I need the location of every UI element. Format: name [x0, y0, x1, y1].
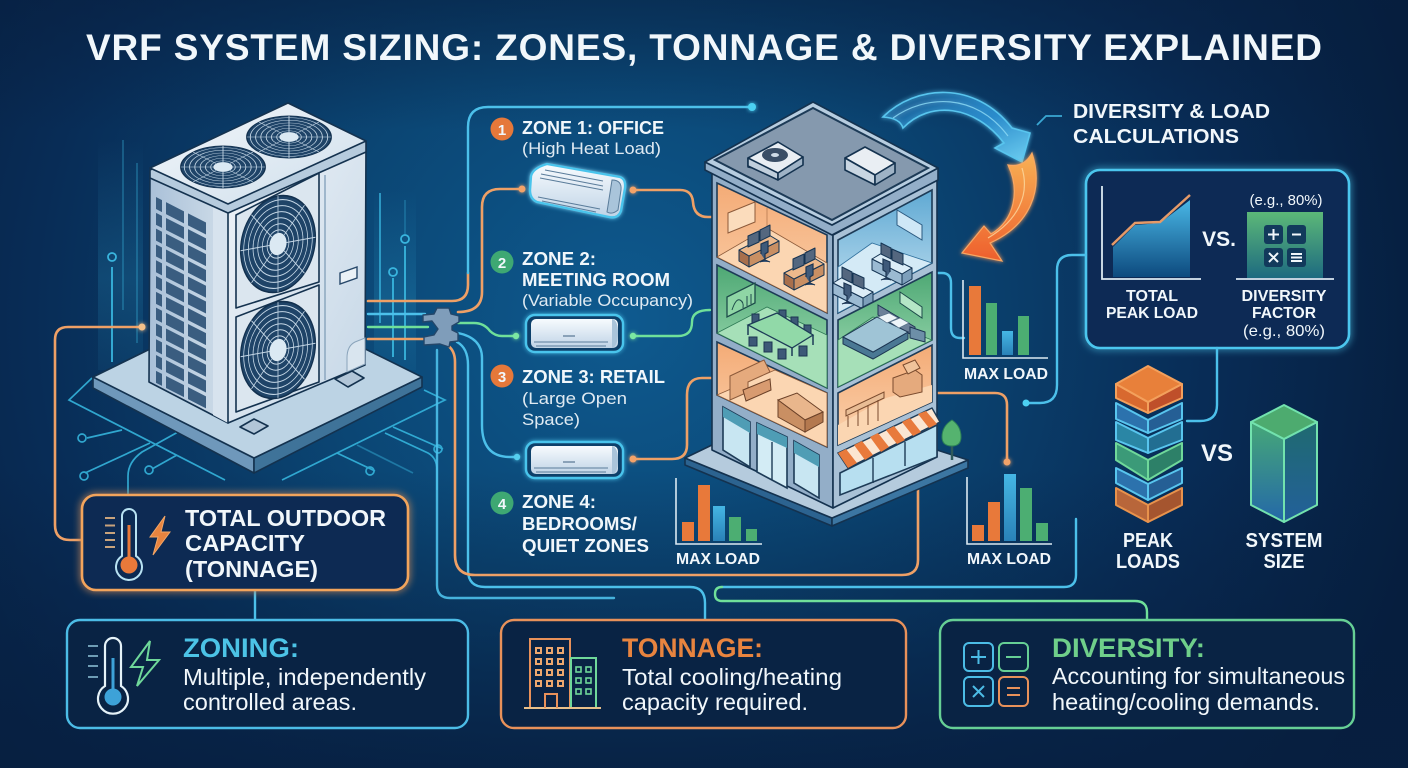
- dot: panel connector end: [1022, 400, 1030, 406]
- panel: total outdoor capacity: [82, 495, 408, 590]
- unit right face: [228, 142, 366, 423]
- heading: diversity and load calculations: CALCULATIONS: [1073, 126, 1239, 148]
- panel: zoning: [67, 620, 468, 728]
- zone 1 label: [490, 118, 664, 158]
- zone 1 label: ZONE 1: OFFICE: [522, 118, 664, 138]
- label: system size: [1246, 530, 1322, 573]
- panel: tonnage: [501, 620, 906, 728]
- labels: TOTAL: [1126, 288, 1178, 305]
- floor: office: [717, 183, 827, 313]
- zone 2 label: ZONE 2:: [522, 249, 596, 269]
- icon: calculator keys: [964, 643, 1028, 706]
- icon: indoor unit zone 3: [526, 442, 623, 478]
- label: system size: SYSTEM: [1246, 530, 1322, 552]
- icon: peak loads stack: [1116, 366, 1182, 522]
- floor: open office: [833, 190, 932, 313]
- text: TOTAL OUTDOOR: [185, 505, 386, 531]
- label: system size: SIZE: [1264, 551, 1304, 573]
- text: Accounting for simultaneous: [1052, 663, 1345, 689]
- heading: diversity and load calculations: DIVERSITY & LOAD: [1073, 101, 1270, 123]
- icon: system size block: [1251, 405, 1317, 522]
- zone 2 label: [490, 249, 693, 310]
- zone 1 label: 1: [498, 122, 506, 139]
- unit left louvred face: [149, 172, 228, 423]
- icon: indoor unit zone 1: [530, 164, 625, 217]
- unit service panel: [240, 175, 365, 434]
- vertical signal lines around outdoor unit: [108, 140, 409, 362]
- zone 4 label: [490, 492, 649, 556]
- dot: outer frame end: [748, 103, 756, 111]
- zone 3 label: ZONE 3: RETAIL: [522, 367, 665, 387]
- unit front fans: [236, 173, 319, 412]
- labels: FACTOR: [1252, 305, 1316, 322]
- vs label: VS.: [1202, 228, 1236, 251]
- floor: bedroom: [838, 272, 932, 387]
- line end dots: [138, 186, 1010, 466]
- chart: max load lower left: [676, 478, 762, 568]
- vs label: VS: [1201, 440, 1233, 467]
- zone 3 label: [490, 364, 665, 429]
- leader line: [1037, 116, 1062, 125]
- zone 3 label: 3: [498, 369, 506, 386]
- unit top face: [150, 103, 366, 213]
- outer frame line around zones: [468, 107, 752, 273]
- diversity factor calculator: (e.g., 80%): [1250, 192, 1322, 209]
- icon: outdoor VRF condenser unit on base: [93, 103, 422, 473]
- text: Total cooling/heating: [622, 664, 842, 690]
- title: VRF SYSTEM SIZING: ZONES, TONNAGE & DIVERSITY EXPLAINED: [86, 27, 1322, 68]
- text: [183, 633, 427, 715]
- text: [622, 633, 842, 715]
- labels: [1106, 288, 1327, 340]
- label: peak loads: PEAK: [1123, 530, 1173, 552]
- roof: [705, 102, 938, 235]
- label: peak loads: [1116, 530, 1180, 573]
- diversity factor calculator: [1236, 192, 1334, 279]
- zone 4 label: BEDROOMS/: [522, 514, 637, 534]
- zone list: [490, 118, 693, 556]
- text: capacity required.: [622, 689, 808, 715]
- icon: cutaway building: [685, 102, 968, 526]
- zone 4 label: QUIET ZONES: [522, 536, 649, 556]
- branch lines from manifold to zones: [55, 189, 1147, 620]
- icon: thermometer and bolt: [105, 509, 170, 580]
- building walls: [712, 170, 937, 508]
- icon: gear manifold: [423, 308, 459, 347]
- zone 2 label: (Variable Occupancy): [522, 291, 693, 310]
- zone 3 label: (Large Open: [522, 389, 627, 408]
- text: [1052, 633, 1345, 715]
- zone 4 label: ZONE 4:: [522, 492, 596, 512]
- area chart: [1102, 186, 1201, 279]
- circuit traces under outdoor unit: [69, 378, 445, 495]
- chart: max load lower right: MAX LOAD: [967, 551, 1051, 568]
- awning: [838, 408, 940, 468]
- text: DIVERSITY:: [1052, 633, 1205, 663]
- floor: meeting room: [717, 265, 827, 388]
- text: (TONNAGE): [185, 556, 318, 582]
- zone 2 label: 2: [498, 255, 506, 272]
- ground floor windows and door: [723, 407, 937, 498]
- unit base plate: [93, 296, 422, 473]
- arrow: orange curved: [962, 153, 1036, 261]
- floor: retail: [717, 342, 827, 447]
- label: peak loads: LOADS: [1116, 551, 1180, 573]
- chart: max load lower left: MAX LOAD: [676, 551, 760, 568]
- text: ZONING:: [183, 633, 299, 663]
- building ground plate: [685, 445, 968, 526]
- text: TONNAGE:: [622, 633, 763, 663]
- chart: max load lower right: [967, 474, 1052, 568]
- icon: indoor unit zone 2: [526, 315, 623, 352]
- heading: diversity and load calculations: [1073, 101, 1270, 148]
- chart: max load right: [963, 280, 1048, 383]
- labels: PEAK LOAD: [1106, 305, 1198, 322]
- labels: DIVERSITY: [1242, 288, 1327, 305]
- refrigerant lines from unit to gear manifold: [368, 273, 468, 339]
- floor: shop upper: [838, 345, 932, 445]
- arrow: blue curved: [883, 92, 1030, 162]
- panel connectors: [1026, 255, 1217, 421]
- zone 4 label: 4: [498, 496, 507, 513]
- icon: tree: [942, 420, 961, 460]
- panel: diversity: [940, 620, 1354, 728]
- text: CAPACITY: [185, 530, 305, 556]
- chart: max load right: MAX LOAD: [964, 366, 1048, 383]
- panel: peak load vs diversity factor: [1086, 170, 1349, 348]
- zone 1 label: (High Heat Load): [522, 139, 661, 158]
- text: controlled areas.: [183, 689, 357, 715]
- labels: (e.g., 80%): [1243, 323, 1325, 340]
- icon: buildings: [524, 639, 601, 708]
- text: [185, 505, 386, 582]
- text: heating/cooling demands.: [1052, 689, 1320, 715]
- icon: thermometer and bolt: [88, 638, 159, 714]
- zone 3 label: Space): [522, 410, 580, 429]
- zone 2 label: MEETING ROOM: [522, 270, 670, 290]
- text: Multiple, independently: [183, 664, 427, 690]
